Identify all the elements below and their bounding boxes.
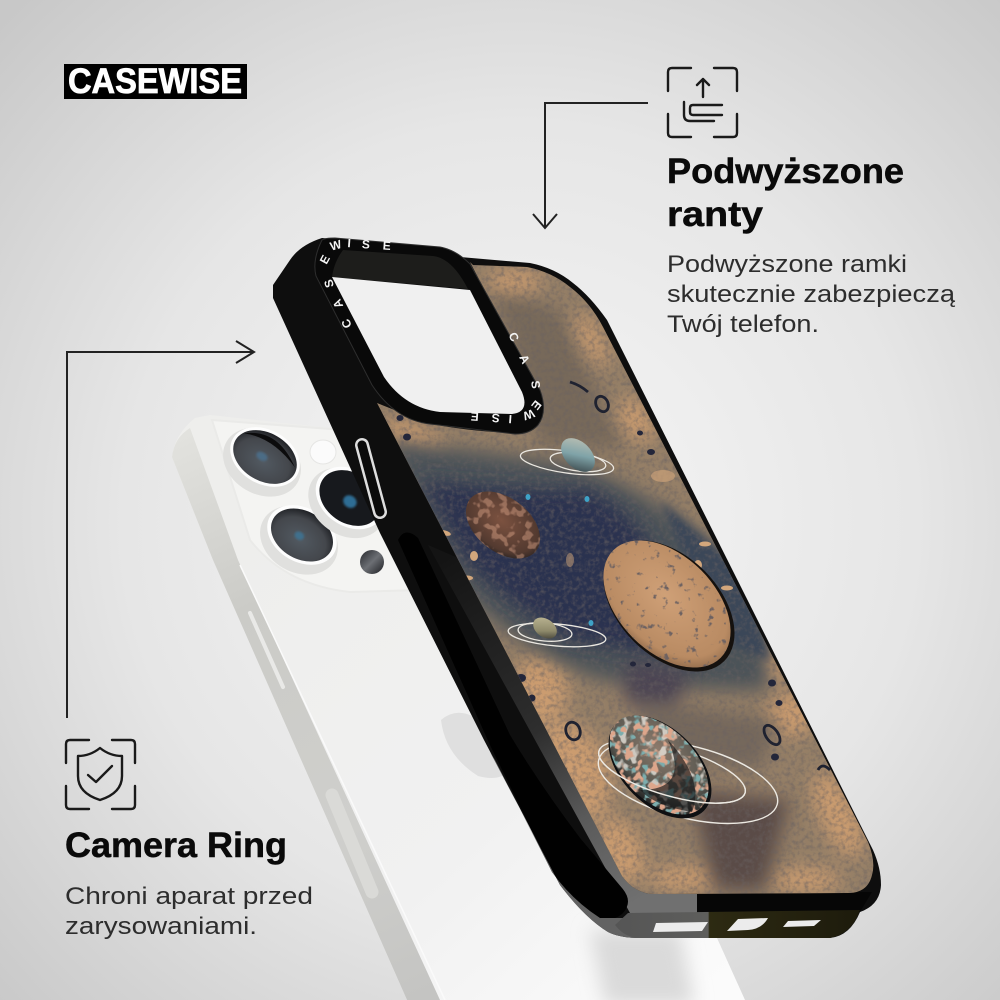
side pill button — [362, 445, 380, 512]
ring brand text left: CASEWISE — [320, 239, 390, 328]
ring inner wall — [332, 250, 468, 289]
sand highlights — [378, 270, 874, 892]
upper side button — [250, 613, 283, 687]
black side slot — [398, 532, 628, 919]
phone side band — [172, 428, 440, 1000]
lens 2 — [247, 491, 351, 588]
black right edge below artwork — [697, 892, 872, 913]
text block: raised edges description: skutecznie zabezpieczą — [667, 281, 956, 308]
dark lower smudge — [690, 790, 790, 890]
planet 5 — [608, 716, 712, 818]
planet 1 rings — [520, 448, 614, 476]
text block: raised edges description: Podwyższone ramki — [667, 251, 907, 278]
blue right edge — [660, 500, 770, 660]
sensor — [360, 550, 384, 574]
blue dots — [526, 494, 594, 626]
planet 2 texture — [466, 492, 540, 558]
dark specks — [396, 415, 782, 760]
speaker opening 2 — [783, 920, 821, 927]
heading: raised edges: Podwyższone — [667, 152, 904, 191]
text block: raised edges description — [667, 251, 956, 338]
tan flecks — [439, 470, 733, 590]
band highlight — [240, 565, 445, 1000]
arrow: camera ring pointer — [67, 341, 254, 718]
craters — [555, 382, 830, 770]
grey-blue band — [385, 440, 770, 690]
planet 3 — [603, 540, 734, 672]
planet 4 — [533, 618, 557, 638]
planet 5 rings back — [598, 742, 778, 824]
icon: camera ring shield — [66, 740, 135, 809]
grey gloss band beside artwork — [428, 545, 697, 913]
lens 1 — [210, 413, 314, 510]
logo: CASEWISE: CASEWISE — [68, 62, 242, 101]
ring body — [315, 238, 544, 434]
planet 1 — [561, 438, 595, 472]
camera ring — [314, 238, 544, 434]
purple smudge — [625, 660, 690, 720]
upper brown tone — [490, 285, 625, 450]
side pill button core — [362, 445, 380, 512]
heading: camera ring: Camera Ring — [65, 826, 287, 865]
icon: raised edges — [668, 68, 737, 137]
port opening — [727, 918, 768, 931]
speaker opening 1 — [653, 922, 708, 932]
arrow: raised edges pointer — [533, 103, 648, 228]
printed art: planets on sand — [370, 255, 880, 900]
text block: camera ring description: Chroni aparat przed — [65, 883, 313, 910]
logo — [441, 713, 510, 778]
case frame — [273, 238, 881, 938]
soft shadow on lower phone — [590, 930, 695, 1000]
ring brand text right: CASEWISE — [471, 332, 542, 424]
phone body — [172, 415, 745, 1000]
white phone behind the case — [172, 413, 745, 1000]
heading: raised edges — [667, 152, 904, 234]
planet 3 markings — [606, 540, 726, 666]
ring opening — [332, 277, 524, 414]
smoky band lower — [640, 700, 780, 770]
camera plateau — [212, 420, 420, 592]
planet 5 texture — [610, 715, 710, 820]
sand base — [370, 255, 880, 900]
lower side button — [332, 795, 372, 892]
deep blue core — [421, 476, 655, 658]
planet 5 rings front — [598, 748, 746, 804]
text block: camera ring description — [65, 883, 313, 940]
planet 4 rings — [508, 622, 606, 648]
text block: camera ring description: zarysowaniami. — [65, 913, 257, 940]
flash — [310, 440, 336, 464]
black phone case — [273, 238, 881, 938]
heading: raised edges: ranty — [667, 195, 764, 234]
lens 3 — [295, 452, 400, 553]
grain texture — [370, 255, 880, 900]
planet 2 — [466, 492, 540, 558]
text block: raised edges description: Twój telefon. — [667, 311, 819, 338]
outer translucent edge — [490, 752, 640, 938]
bottom lip — [615, 910, 860, 938]
